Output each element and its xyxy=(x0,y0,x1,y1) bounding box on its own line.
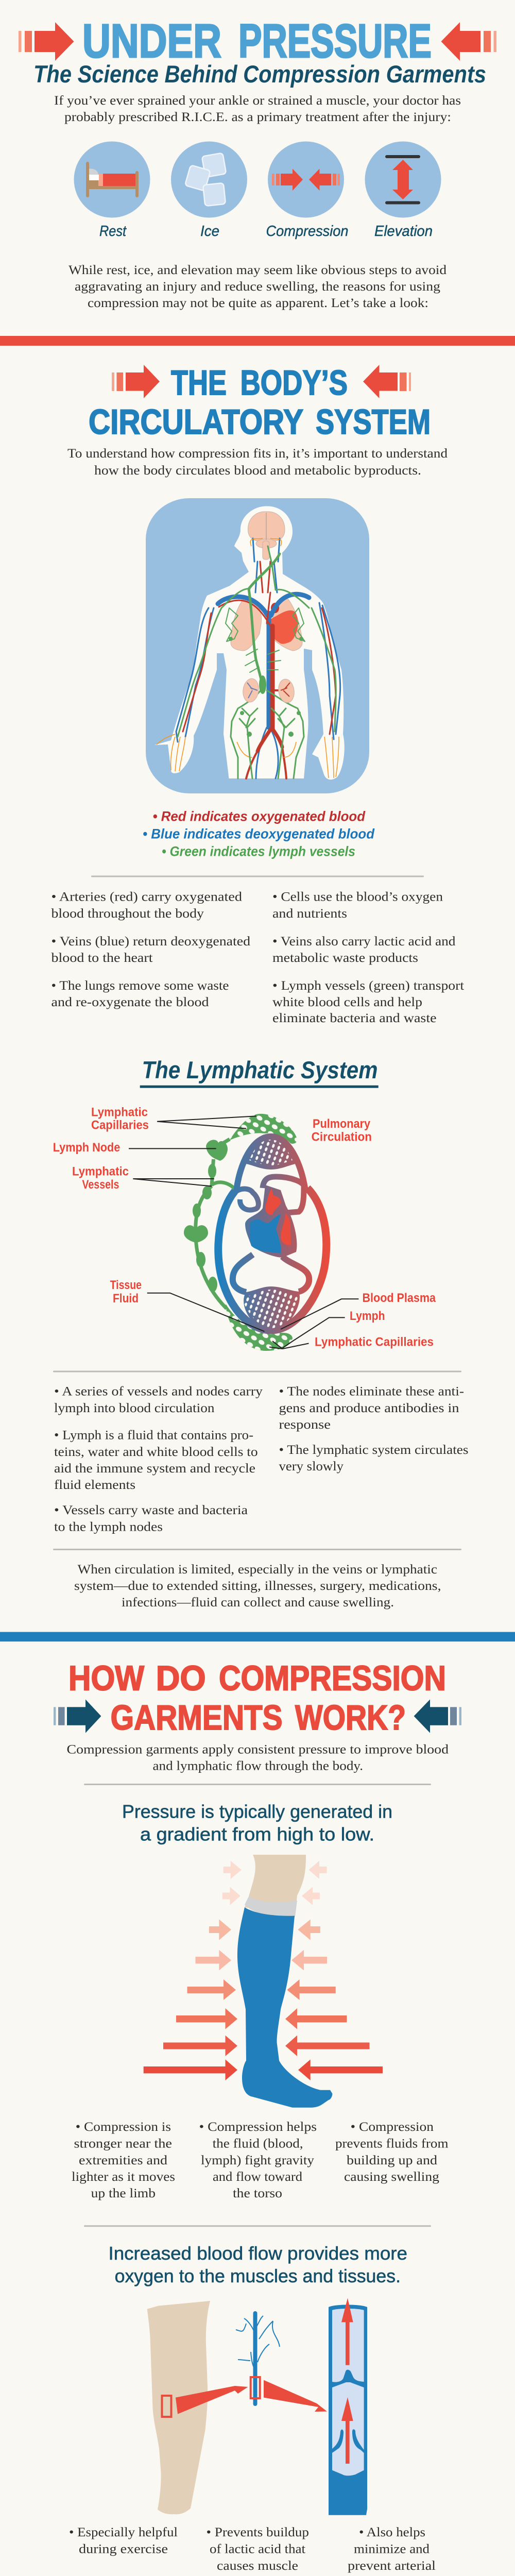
heading: pressure gradient: a gradient from high to low. xyxy=(140,1824,374,1844)
heading text: SYSTEM xyxy=(316,402,431,442)
heart xyxy=(266,611,298,644)
bullets: blood flow xyxy=(69,2526,436,2576)
bullets: circulation: blood throughout the body xyxy=(52,907,204,921)
heading: The Lymphatic System: The Lymphatic System xyxy=(142,1056,378,1083)
bullets: blood flow: • Especially helpful xyxy=(69,2526,178,2539)
label: compression: Compression xyxy=(266,223,348,240)
bullets: blood flow: minimize and xyxy=(354,2542,430,2556)
vessel xyxy=(236,2313,280,2404)
bullets: circulation: • Lymph vessels (green) transport xyxy=(272,979,464,993)
text: limited circulation: infections—fluid can collect and cause swelling. xyxy=(122,1596,394,1609)
heading text: BODY’S xyxy=(240,363,348,402)
bullets: pressure gradient: • Compression is xyxy=(76,2120,171,2134)
icon: compression arrows xyxy=(268,141,344,217)
heading: increased blood flow: oxygen to the muscles and tissues. xyxy=(115,2265,401,2286)
small arteries xyxy=(157,538,339,778)
intro text: probably prescribed R.I.C.E. as a primary treatment after the injury: xyxy=(64,110,451,124)
panel: R.I.C.E. icons xyxy=(74,141,441,240)
bullets: blood flow: of lactic acid that xyxy=(210,2542,305,2556)
heart xyxy=(245,1185,297,1258)
heading: How Do Compression Garments Work xyxy=(54,1659,461,1737)
arrow: right xyxy=(363,365,411,398)
heading: The Body's Circulatory System xyxy=(89,363,431,442)
icon: ice cubes xyxy=(171,141,247,217)
lymph vessels xyxy=(178,546,336,778)
bullets: pressure gradient: • Compression xyxy=(350,2120,434,2134)
arrow: right xyxy=(414,1699,461,1733)
bullets: lymphatic: • Vessels carry waste and bacteria xyxy=(54,1503,248,1517)
label: lymph: Lymph xyxy=(350,1309,385,1323)
bullets: pressure gradient: lighter as it moves xyxy=(72,2170,175,2184)
text: limited circulation: When circulation is limited, especially in the veins or lymphatic xyxy=(77,1563,437,1577)
heading text: GARMENTS xyxy=(111,1698,283,1737)
intro text xyxy=(54,94,461,124)
title: UNDER xyxy=(82,15,221,67)
bullets: pressure gradient: prevents fluids from xyxy=(335,2137,449,2151)
leader lines xyxy=(129,1116,358,1349)
arrow: left pressure arrow xyxy=(19,22,74,61)
bullets: lymphatic xyxy=(54,1385,469,1534)
bullets: blood flow: during exercise xyxy=(79,2542,168,2556)
veins xyxy=(176,538,340,778)
text: circulatory intro: To understand how compression fits in, it’s important to understand xyxy=(67,447,448,461)
bullets: pressure gradient xyxy=(72,2120,449,2200)
bullets: circulation: • Cells use the blood’s oxygen xyxy=(272,890,443,904)
label: tissue fluid xyxy=(110,1278,142,1306)
legend xyxy=(143,809,374,859)
vein cross-section xyxy=(329,2305,367,2515)
label: tissue fluid: Fluid xyxy=(113,1292,139,1306)
intro text: If you’ve ever sprained your ankle or strained a muscle, your doctor has xyxy=(54,94,461,108)
bullets: lymphatic: teins, water and white blood cells to xyxy=(54,1445,258,1459)
bullets: circulation: • The lungs remove some waste xyxy=(52,979,229,993)
label: elevation: Elevation xyxy=(374,223,433,240)
heading text: DO xyxy=(156,1659,206,1698)
arteries xyxy=(183,562,336,778)
bullets: lymphatic: • The nodes eliminate these anti- xyxy=(279,1385,464,1399)
legend: • Blue indicates deoxygenated blood xyxy=(143,826,374,842)
label: blood plasma: Blood Plasma xyxy=(363,1291,436,1305)
bullets: lymphatic: • A series of vessels and nodes carry xyxy=(54,1385,263,1399)
bullets: circulation xyxy=(52,890,464,1025)
heading: pressure gradient xyxy=(122,1801,392,1844)
bullets: lymphatic: very slowly xyxy=(279,1460,344,1473)
bullets: pressure gradient: the fluid (blood, xyxy=(213,2137,303,2151)
label: tissue fluid: Tissue xyxy=(110,1278,142,1292)
legend: • Red indicates oxygenated blood xyxy=(152,809,365,824)
kidneys xyxy=(242,677,296,704)
chart: blood flow leg, vessel and vein xyxy=(147,2298,367,2515)
bullets: pressure gradient: lymph) fight gravity xyxy=(201,2154,315,2167)
heading: increased blood flow xyxy=(108,2243,407,2286)
bullets: lymphatic: • Lymph is a fluid that contains pro- xyxy=(54,1429,253,1443)
bullets: lymphatic: lymph into blood circulation xyxy=(54,1401,215,1415)
bullets: circulation: eliminate bacteria and waste xyxy=(272,1011,437,1025)
arrow: right pressure arrow xyxy=(441,22,496,61)
text: circulatory intro: how the body circulates blood and metabolic byproducts. xyxy=(94,464,421,478)
bullets: blood flow: causes muscle xyxy=(217,2559,298,2573)
panel: body circulatory diagram xyxy=(146,498,369,793)
bullets: circulation: white blood cells and help xyxy=(272,995,422,1009)
heading text: CIRCULATORY xyxy=(89,402,303,442)
bullets: lymphatic: • The lymphatic system circulates xyxy=(279,1443,469,1457)
title xyxy=(82,15,432,67)
label: lymph node: Lymph Node xyxy=(53,1141,120,1155)
text: compression intro xyxy=(67,1742,449,1773)
heading text: WORK? xyxy=(295,1698,406,1737)
bullets: pressure gradient: building up and xyxy=(347,2154,438,2167)
bullets: lymphatic: fluid elements xyxy=(54,1478,135,1492)
blood circulation loop xyxy=(218,1137,327,1331)
blue compression sock xyxy=(237,1907,332,2108)
label: lymphatic capillaries: Lymphatic xyxy=(91,1105,148,1119)
intro text 2: While rest, ice, and elevation may seem like obvious steps to avoid xyxy=(68,263,447,277)
bullets: pressure gradient: causing swelling xyxy=(344,2170,440,2184)
flow arrows inside vein xyxy=(341,2298,353,2464)
text: circulatory intro xyxy=(67,447,448,478)
bullets: circulation: metabolic waste products xyxy=(272,951,418,965)
arrow: left xyxy=(54,1699,101,1733)
text: limited circulation: system—due to extended sitting, illnesses, surgery, medications, xyxy=(74,1579,441,1593)
heading text xyxy=(89,363,431,442)
bullets: lymphatic: to the lymph nodes xyxy=(54,1520,163,1534)
heading text: COMPRESSION xyxy=(219,1659,446,1698)
magnifier boxes xyxy=(162,2377,260,2417)
intro text 2: compression may not be quite as apparent. Let’s take a look: xyxy=(88,296,428,310)
label: pulmonary circulation xyxy=(312,1117,372,1144)
bullets: pressure gradient: up the limb xyxy=(91,2187,156,2200)
pressure arrows xyxy=(144,1861,383,2080)
heading text: THE xyxy=(171,363,227,402)
bullets: blood flow: • Also helps xyxy=(359,2526,425,2539)
legend: • Green indicates lymph vessels xyxy=(162,844,355,859)
bullets: circulation: blood to the heart xyxy=(52,951,153,965)
label: lymphatic capillaries lower: Lymphatic Capillaries xyxy=(315,1335,434,1349)
lungs xyxy=(231,597,302,651)
label: ice: Ice xyxy=(200,223,219,240)
leg xyxy=(147,2301,210,2514)
text: compression intro: and lymphatic flow through the body. xyxy=(152,1759,363,1773)
bullets: lymphatic: aid the immune system and recycle xyxy=(54,1462,255,1476)
intro text 2 xyxy=(68,263,447,310)
chart: lymphatic system diagram xyxy=(53,1105,436,1351)
bullets: pressure gradient: extremities and xyxy=(79,2154,168,2167)
bullets: pressure gradient: and flow toward xyxy=(213,2170,303,2184)
body silhouette xyxy=(154,506,345,779)
heading text: HOW xyxy=(68,1659,145,1698)
zoom arrows xyxy=(176,2380,327,2414)
label: lymphatic vessels: Vessels xyxy=(82,1178,119,1192)
label: lymphatic capillaries: Capillaries xyxy=(91,1118,149,1132)
icon: elevation arrow xyxy=(365,141,441,217)
bullets: lymphatic: response xyxy=(279,1418,331,1432)
heading: pressure gradient: Pressure is typically generated in xyxy=(122,1801,392,1822)
bullets: lymphatic: gens and produce antibodies in xyxy=(279,1401,459,1415)
bullets: circulation: • Veins (blue) return deoxygenated xyxy=(52,935,251,948)
heading: increased blood flow: Increased blood flow provides more xyxy=(108,2243,407,2264)
bullets: pressure gradient: the torso xyxy=(233,2187,282,2200)
label: rest: Rest xyxy=(99,223,127,240)
heart chambers xyxy=(250,1214,281,1253)
label: lymphatic vessels xyxy=(72,1165,129,1192)
text: compression intro: Compression garments apply consistent pressure to improve blood xyxy=(67,1742,449,1756)
bullets: circulation: and re-oxygenate the blood xyxy=(52,995,209,1009)
arrow: left xyxy=(112,365,160,398)
header: Under Pressure xyxy=(19,15,496,88)
bullets: blood flow: • Prevents buildup xyxy=(206,2526,309,2539)
leg skin xyxy=(245,1855,306,1916)
grey sock band xyxy=(245,1896,297,1917)
label: lymphatic capillaries xyxy=(91,1105,149,1132)
bullets: circulation: and nutrients xyxy=(272,907,347,921)
title: PRESSURE xyxy=(238,15,432,67)
bullets: circulation: • Arteries (red) carry oxygenated xyxy=(52,890,243,904)
heading text xyxy=(68,1659,446,1737)
lymph vessel path xyxy=(184,1114,297,1351)
label: pulmonary circulation: Circulation xyxy=(312,1130,372,1144)
bullets: blood flow: prevent arterial xyxy=(348,2559,436,2573)
bullets: pressure gradient: • Compression helps xyxy=(199,2120,317,2134)
bullets: circulation: • Veins also carry lactic acid and xyxy=(272,935,456,948)
chart: gradient pressure on leg xyxy=(144,1855,383,2108)
label: lymphatic vessels: Lymphatic xyxy=(72,1165,129,1179)
label: pulmonary circulation: Pulmonary xyxy=(313,1117,371,1131)
brain xyxy=(248,512,285,560)
icon: rest bed xyxy=(74,141,150,217)
text: limited circulation xyxy=(74,1563,441,1609)
bullets: pressure gradient: stronger near the xyxy=(74,2137,172,2151)
intro text 2: aggravating an injury and reduce swelling, the reasons for using xyxy=(75,280,441,294)
